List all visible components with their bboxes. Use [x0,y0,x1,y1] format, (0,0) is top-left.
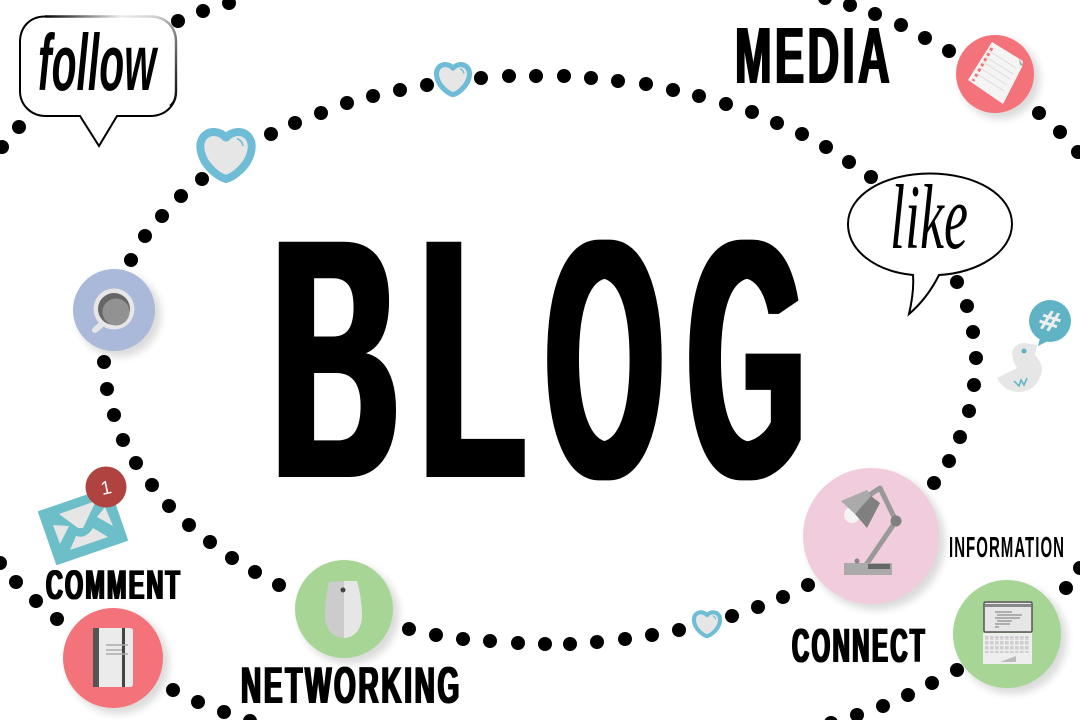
speech bubble: follow: follow [38,18,158,107]
title: BLOG: L [420,168,525,550]
icon: red circle with notebook [63,608,169,714]
dotted path: central ellipse [97,69,983,651]
icon: green circle with laptop [953,580,1067,694]
icon: red circle with paper [956,35,1040,119]
icon: envelope with notification badge: 1 [99,477,114,500]
label: NETWORKING: NETWORKING [241,657,462,715]
icon: green circle with mouse [295,560,399,664]
text: G [688,170,805,550]
icon: bird with hashtag bubble [997,300,1071,392]
icon: envelope with notification badge [39,466,127,564]
icon: bird with hashtag bubble: # [1034,302,1066,341]
icon: large heart [200,132,252,179]
icon: blue circle with coffee cup [73,269,161,357]
label: MEDIA: MEDIA [735,11,893,100]
speech bubble: follow [20,16,176,146]
icon: pink circle with desk lamp [803,468,945,610]
speech bubble: like: like [890,166,968,268]
title: BLOG: B [272,168,399,550]
text: CONNECT [792,620,927,673]
label: COMMENT: COMMENT [46,561,182,608]
title: BLOG: O [546,170,663,550]
icon: bottom heart [694,612,720,636]
title: BLOG [272,168,805,550]
speech bubble: like [848,166,1012,314]
icon: top heart [437,65,469,95]
